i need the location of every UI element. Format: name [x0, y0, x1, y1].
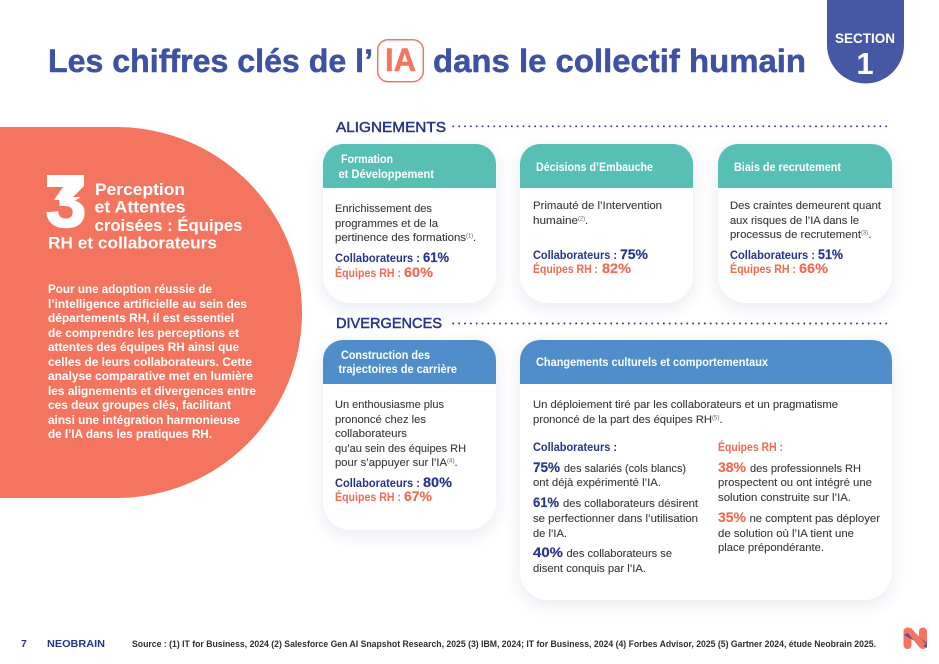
panel body text: celles de leurs collaborateurs. Cette — [48, 357, 252, 369]
card: biais de recrutement: 66% — [799, 260, 829, 276]
card: formation et développement: 61% — [423, 249, 450, 265]
heading: divergences: DIVERGENCES — [336, 315, 442, 332]
card: construction des trajectoires de carrière: collaborateurs — [335, 428, 408, 440]
column: collaborateurs: des collaborateurs se — [566, 548, 672, 560]
card: construction des trajectoires de carrière: pour s’appuyer sur l’IA — [335, 457, 448, 469]
card: changements culturels et comportementaux: prononcé de la part des équipes RH — [533, 414, 712, 426]
column: collaborateurs: disent conquis par l’IA. — [533, 563, 646, 575]
card: changements culturels et comportementaux — [520, 340, 892, 600]
panel body text: ainsi une intégration harmonieuse — [48, 415, 240, 427]
card: formation et développement: et Développement — [338, 169, 434, 181]
panel heading: croisées : Équipes — [94, 216, 242, 235]
highlighted word: IA — [378, 40, 423, 82]
column: équipes RH: des professionnels RH — [750, 463, 861, 475]
card: biais de recrutement: Collaborateurs : — [730, 250, 815, 262]
panel body text: de l’IA dans les pratiques RH. — [48, 429, 212, 441]
column: équipes RH: 38% — [718, 459, 747, 475]
icon: neobrain logo — [904, 628, 927, 648]
section tab — [827, 0, 904, 84]
section tab: SECTION — [835, 31, 895, 46]
title — [48, 40, 806, 82]
card: décisions d'embauche: humaine — [533, 215, 578, 227]
card: formation et développement: programmes et de la — [335, 218, 439, 230]
card: construction des trajectoires de carrière: Équipes RH : — [335, 491, 401, 504]
card: biais de recrutement — [718, 144, 892, 303]
column: collaborateurs: Collaborateurs : — [533, 442, 617, 454]
card: formation et développement: pertinence des formations — [335, 232, 467, 244]
panel body text: ces deux groupes clés, facilitant — [48, 400, 231, 412]
card: changements culturels et comportementaux: . — [720, 414, 723, 426]
card: décisions d'embauche: Équipes RH : — [533, 263, 598, 276]
panel: perception et attentes croisées — [0, 127, 302, 498]
card: changements culturels et comportementaux: Changements culturels et comportementaux — [536, 357, 769, 369]
panel heading: et Attentes — [94, 198, 186, 216]
card: décisions d'embauche: 82% — [602, 260, 632, 276]
card: biais de recrutement: processus de recrutement — [730, 229, 861, 241]
panel body text: départements RH, il est essentiel — [48, 313, 234, 325]
card: construction des trajectoires de carrière: 67% — [404, 488, 433, 504]
column: collaborateurs — [533, 442, 698, 575]
card: biais de recrutement: 51% — [818, 246, 843, 262]
column: collaborateurs: des salariés (cols blancs) — [564, 463, 686, 475]
card: construction des trajectoires de carrière: prononcé chez les — [335, 414, 427, 426]
panel body text: attentes des équipes RH ainsi que — [48, 342, 239, 354]
card: construction des trajectoires de carrière: trajectoires de carrière — [338, 364, 457, 376]
card: construction des trajectoires de carrière: . — [454, 457, 458, 469]
column: équipes RH: de solution où l’IA tient une — [718, 528, 854, 540]
title: Les chiffres clés de l’ — [48, 43, 373, 79]
big number 3: 3 — [46, 162, 86, 242]
title: dans le collectif humain — [433, 43, 806, 79]
section tab: 1 — [856, 46, 874, 81]
big number 3 — [46, 175, 85, 228]
card: biais de recrutement: (3) — [861, 230, 868, 236]
panel heading — [48, 180, 242, 252]
card: formation et développement: Collaborateurs : — [335, 253, 420, 265]
column: collaborateurs: 40% — [533, 544, 564, 560]
card: décisions d'embauche: . — [585, 215, 588, 227]
column: collaborateurs: 61% — [533, 494, 560, 510]
card: décisions d'embauche: Collaborateurs : — [533, 250, 617, 262]
column: collaborateurs: ont déjà expérimenté l’IA. — [533, 477, 661, 489]
column: collaborateurs: des collaborateurs désirent — [563, 498, 698, 510]
card: construction des trajectoires de carrière — [323, 340, 496, 530]
card: construction des trajectoires de carrière: Collaborateurs : — [335, 478, 420, 490]
panel body text: de comprendre les perceptions et — [48, 328, 239, 340]
brand name: NEOBRAIN — [47, 638, 105, 650]
card: construction des trajectoires de carrière: Un enthousiasme plus — [335, 399, 444, 411]
card: formation et développement — [323, 144, 496, 303]
card: biais de recrutement: aux risques de l’IA dans le — [730, 215, 859, 227]
card: biais de recrutement: Équipes RH : — [730, 263, 796, 276]
panel body text: l’intelligence artificielle au sein des — [48, 299, 247, 311]
column: équipes RH — [718, 441, 880, 554]
card: formation et développement: (1) — [466, 234, 473, 240]
column: équipes RH: place prépondérante. — [718, 542, 824, 554]
panel body text: Pour une adoption réussie de — [48, 284, 212, 296]
card: décisions d'embauche: Primauté de l’Intervention — [533, 200, 662, 212]
panel body text — [48, 284, 256, 441]
page number: 7 — [21, 638, 27, 650]
card: formation et développement: . — [473, 232, 476, 244]
panel heading: Perception — [95, 180, 185, 199]
heading: alignements: ALIGNEMENTS — [336, 119, 446, 136]
card: biais de recrutement: . — [868, 229, 872, 241]
card: formation et développement: Enrichissement des — [335, 203, 432, 215]
column: collaborateurs: 75% — [533, 459, 561, 475]
panel body text: analyse comparative met en lumière — [48, 371, 253, 383]
card: formation et développement: Formation — [341, 154, 393, 166]
card: changements culturels et comportementaux: Un déploiement tiré par les collaborateurs et un pragmatisme — [533, 399, 838, 411]
panel heading: RH et collaborateurs — [48, 234, 217, 252]
card: construction des trajectoires de carrière: qu’au sein des équipes RH — [335, 443, 466, 455]
card: décisions d'embauche — [520, 144, 693, 303]
card: changements culturels et comportementaux: (5) — [712, 416, 720, 422]
panel body text: les alignements et divergences entre — [48, 386, 256, 398]
column: équipes RH: ne comptent pas déployer — [750, 513, 880, 525]
card: construction des trajectoires de carrière: 80% — [423, 474, 453, 490]
highlighted word: IA: IA — [385, 42, 416, 78]
card: formation et développement: Équipes RH : — [335, 267, 401, 280]
card: formation et développement: 60% — [404, 264, 434, 280]
column: collaborateurs: de l’IA. — [533, 528, 567, 540]
card: biais de recrutement: Des craintes demeurent quant — [730, 200, 881, 212]
source note: Source : (1) IT for Business, 2024 (2) Salesforce Gen AI Snapshot Research, 2025 (3) IBM, 2024; IT for Business, 2024 (4) Forbes Advisor, 2025 (5) Gartner 2024, étude Neobrain 2025. — [132, 639, 876, 649]
card: biais de recrutement: Biais de recrutement — [734, 162, 841, 174]
card: construction des trajectoires de carrière: (4) — [447, 458, 454, 464]
column: équipes RH: prospectent ou ont intégré une — [718, 477, 872, 489]
card: décisions d'embauche: (2) — [578, 216, 585, 222]
column: équipes RH: solution construite sur l’IA. — [718, 492, 851, 504]
column: équipes RH: Équipes RH : — [718, 441, 783, 454]
card: construction des trajectoires de carrière: Construction des — [341, 350, 430, 362]
column: équipes RH: 35% — [718, 509, 747, 525]
card: décisions d'embauche: 75% — [620, 246, 649, 262]
card: décisions d'embauche: Décisions d’Embauche — [536, 162, 653, 174]
column: collaborateurs: se perfectionner dans l’utilisation — [533, 513, 698, 525]
